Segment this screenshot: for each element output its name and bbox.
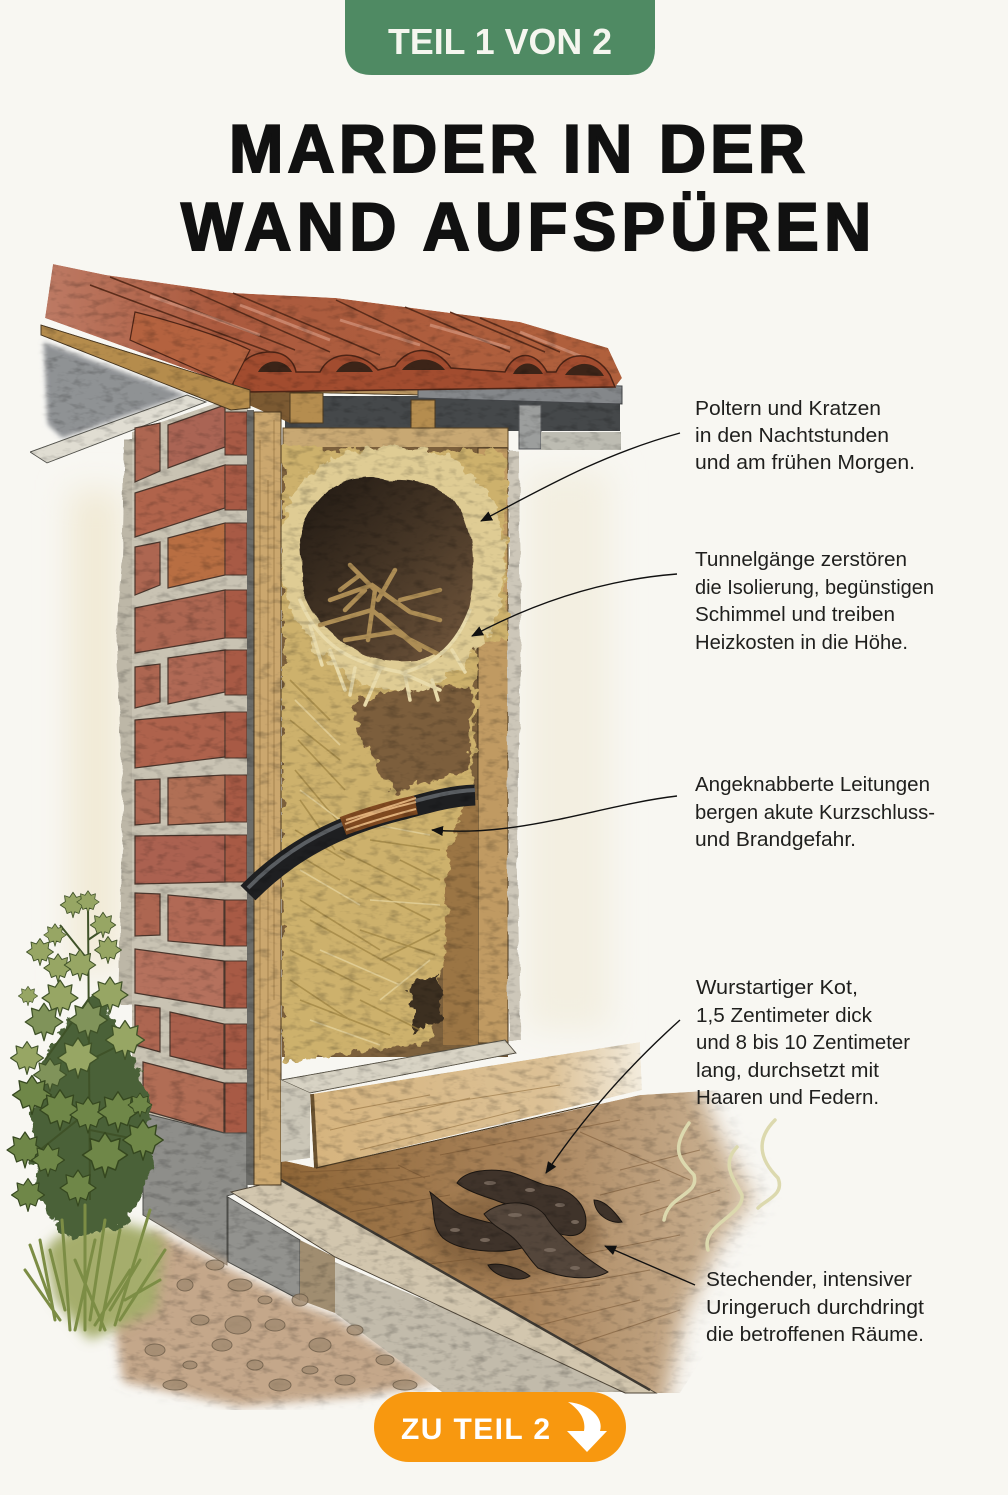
front threshold plank: [231, 1180, 656, 1393]
callout text: tunnels: Tunnelgänge zerstören: [695, 548, 907, 571]
brick column: [132, 400, 248, 1140]
callout text: droppings: Wurstartiger Kot,: [696, 976, 858, 999]
right plaster edge: [508, 450, 521, 1040]
callout text: tunnels: Schimmel und treiben: [695, 603, 895, 626]
right stud: [478, 448, 508, 1043]
callout text: tunnels: Heizkosten in die Höhe.: [695, 631, 908, 654]
tile ends: [233, 350, 615, 392]
callout arrow: cables: [432, 796, 677, 831]
cable: [248, 790, 475, 893]
callout text: cables: [695, 773, 935, 851]
callout text: noises: Poltern und Kratzen: [695, 397, 881, 420]
fascia board: [41, 325, 250, 410]
insulation fibres: [290, 680, 460, 1035]
callout text: tunnels: die Isolierung, begünstigen: [695, 576, 934, 599]
callout arrow: smell: [605, 1246, 695, 1285]
callout text: noises: [695, 397, 915, 474]
callout text: cables: bergen akute Kurzschluss-: [695, 801, 935, 824]
callout text: smell: [706, 1268, 924, 1346]
callout text: droppings: Haaren und Federn.: [696, 1086, 879, 1109]
nest twigs: [320, 565, 440, 655]
grass and plant: [7, 891, 165, 1340]
badge: part 1 of 2: [345, 0, 655, 75]
plaster edge trim: [30, 395, 206, 463]
torn insulation strands under the hole: [300, 600, 470, 705]
gravel stones: [145, 1260, 417, 1391]
callout arrow: tunnels: [472, 574, 677, 636]
sill and baseboard: [281, 1040, 642, 1168]
callout text: droppings: 1,5 Zentimeter dick: [696, 1004, 873, 1027]
insulation highlights: [295, 700, 440, 1045]
insulation hole ring: [282, 447, 505, 691]
button: to part 2: ZU TEIL 2: [401, 1413, 550, 1446]
odor squiggles: [664, 1120, 779, 1250]
callout text: noises: in den Nachtstunden: [695, 424, 889, 447]
callout text: tunnels: [695, 548, 934, 654]
title: WAND AUFSPÜREN: [181, 190, 871, 265]
callout text: cables: Angeknabberte Leitungen: [695, 773, 930, 796]
insulation: [282, 447, 507, 1062]
left post: [247, 410, 281, 1185]
button: to part 2: [374, 1392, 626, 1462]
icon: curved down arrow: [567, 1402, 607, 1452]
concrete foundation front: [228, 1197, 300, 1300]
callout arrow: droppings: [546, 1020, 680, 1173]
callout text: smell: Uringeruch durchdringt: [706, 1296, 924, 1319]
callout arrow: noises: [481, 433, 680, 521]
floor: [281, 1090, 820, 1393]
callout text: noises: und am frühen Morgen.: [695, 451, 915, 474]
callout text: droppings: und 8 bis 10 Zentimeter: [696, 1031, 910, 1054]
roof tiles: [45, 264, 622, 392]
rough plaster beside bricks: [116, 440, 137, 1005]
roof structure under tiles: [244, 366, 622, 450]
callout text: droppings: [696, 976, 910, 1109]
title: MARDER IN DER: [229, 112, 805, 187]
title: [181, 112, 871, 265]
concrete plinth: [143, 1113, 247, 1265]
grey wall under eaves: [42, 340, 190, 440]
callout text: smell: Stechender, intensiver: [706, 1268, 912, 1291]
callout text: smell: die betroffenen Räume.: [706, 1323, 924, 1346]
illustration: wall cross-section: [7, 264, 820, 1410]
badge: part 1 of 2: TEIL 1 VON 2: [388, 21, 612, 62]
cavity backing: [282, 447, 508, 1057]
callout text: cables: und Brandgefahr.: [695, 828, 856, 851]
callout text: droppings: lang, durchsetzt mit: [696, 1059, 879, 1082]
gravel ground: [110, 1225, 445, 1410]
dark hole: [300, 478, 473, 661]
watercolor washes on the outer wall: [70, 470, 610, 1030]
droppings: [430, 1170, 622, 1279]
